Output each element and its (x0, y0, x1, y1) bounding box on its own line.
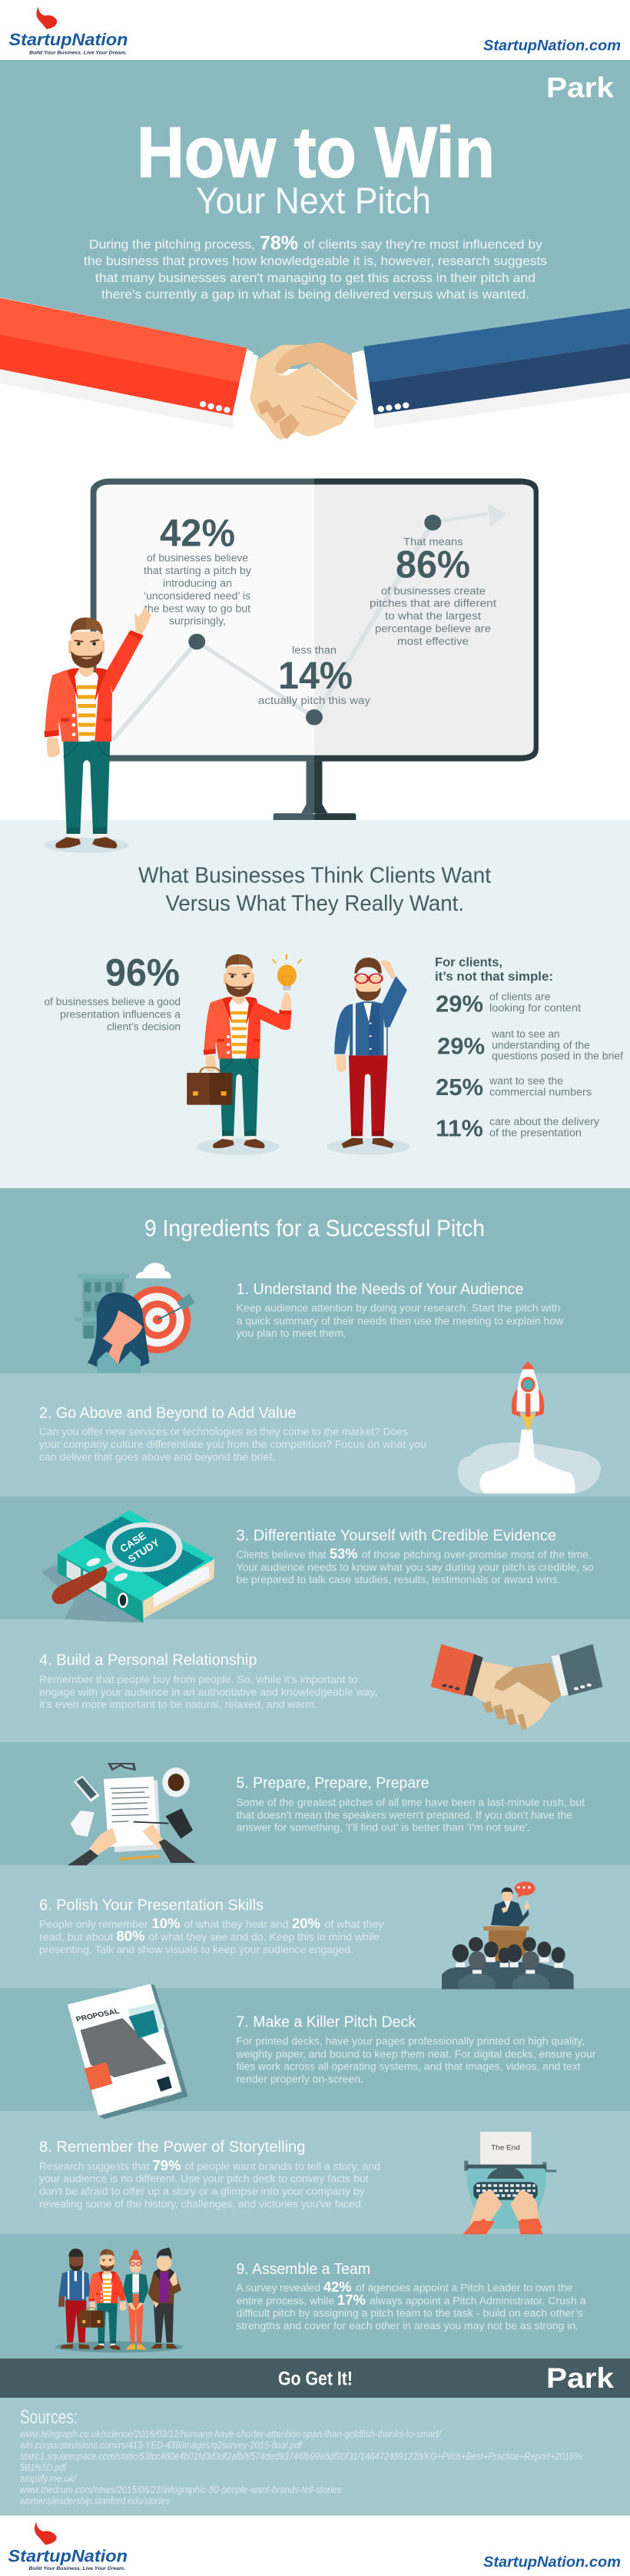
icon: light bulb (273, 954, 301, 991)
stat: 29% content (436, 990, 581, 1017)
arrow head (488, 504, 506, 527)
Park logo: Park (546, 72, 614, 103)
stat: 14%: 14% (278, 654, 353, 697)
intro paragraph: there's currently a gap in what is being delivered versus what is wanted. (101, 287, 529, 301)
ingredient 6 text: of what they see and do. Keep this in mind while (149, 1931, 380, 1943)
stat: 29% understanding: understanding of the (492, 1039, 590, 1051)
stat: 42%: ‘unconsidered need’ is (144, 590, 250, 602)
ingredient 9 text: 9. Assemble a Team (237, 2260, 370, 2278)
sources list: win.corporatevisions.com/rs/413-YED-439/images/q2survey-2015-final.pdf (20, 2440, 303, 2451)
ingredient 4 text: engage with your audience in an authoritative and knowledgeable way, (39, 1686, 377, 1698)
ingredient 6 text: 6. Polish Your Presentation Skills (39, 1897, 264, 1914)
panel: what businesses think versus clients want (0, 820, 630, 1188)
ingredient 3 text: Your audience needs to know what you say during your pitch is credible, so (237, 1562, 593, 1573)
icon: torch flame (36, 7, 57, 29)
the end page label: The End (491, 2143, 520, 2152)
panel: for clients it's not that simple: For clients, (435, 954, 502, 970)
intro paragraph: the business that proves how knowledgeable it is, however, research suggests (84, 254, 547, 268)
stat: 42%: surprisingly, (169, 615, 226, 627)
team member: man in brown jacket (148, 2247, 181, 2349)
ingredient 9 text: A survey revealed (237, 2282, 320, 2293)
lectern (483, 1927, 529, 1964)
ingredient 9 text: strengths and cover for each other in areas you may not be as strong in. (237, 2320, 579, 2332)
ingredient 2 text: Can you offer new services or technologies as they come to the market? Does (39, 1426, 408, 1437)
sources list (20, 2428, 582, 2507)
ingredient 8 text: Research suggests that (39, 2161, 150, 2172)
stat: 42%: of businesses believe (147, 552, 248, 564)
ingredient 1 text: 1. Understand the Needs of Your Audience (237, 1280, 524, 1298)
ingredient 3 text (237, 1526, 593, 1585)
ingredient 4 text: 4. Build a Personal Relationship (39, 1651, 257, 1669)
ingredient 3 text: 53% (330, 1546, 358, 1562)
intro paragraph: 78% (260, 232, 298, 254)
stat: 86% (370, 536, 496, 647)
ingredient 7 text: weighty paper, and bound to keep them neat. For digital decks, ensure your (235, 2049, 596, 2060)
ingredient 6 icon: speaker and audience (442, 1881, 574, 1989)
sources list: www.telegraph.co.uk/science/2016/03/12/humans-have-shorter-attention-span-than-goldfish-thanks-to-smart/ (20, 2428, 442, 2439)
ingredient 2 text: 2. Go Above and Beyond to Add Value (39, 1404, 297, 1422)
blue sleeve (363, 308, 630, 415)
stat: 86%: to what the largest (385, 610, 481, 622)
stat: 96%: presentation influences a (60, 1008, 181, 1021)
ingredient 9 text: 17% (337, 2292, 366, 2308)
ingredient 6 text: of what they (324, 1918, 384, 1930)
stat: 86%: of businesses create (381, 586, 486, 596)
ingredient 9 text: 42% (323, 2279, 352, 2295)
heading: what businesses think: What Businesses Think Clients Want (138, 864, 491, 888)
ingredient 9 text: entire process, while (237, 2295, 334, 2307)
icon: torch flame (35, 2522, 57, 2545)
stat: 11% (436, 1114, 599, 1142)
intro paragraph (84, 232, 547, 301)
ingredient 1 icon: woman and target (75, 1263, 195, 1373)
stat: 29% understanding: want to see an (491, 1028, 559, 1040)
stat: 42%: that starting a pitch by (144, 565, 251, 576)
ingredient 6 text (39, 1897, 384, 1955)
ingredient 2 text (39, 1404, 426, 1463)
stat: 96% (45, 951, 181, 1033)
stat: 42% (144, 512, 251, 627)
stat: 96%: 96% (105, 951, 180, 994)
ingredient 6 text: 10% (152, 1916, 180, 1931)
stat: 25%: 25% (436, 1074, 483, 1100)
ingredient 4 text (39, 1651, 377, 1711)
ingredient 7 icon: proposal booklet (68, 1984, 188, 2119)
ingredient 8 text: your audience is no different. Use your pitch deck to convey facts but (39, 2173, 369, 2184)
stat: 96%: client’s decision (107, 1021, 181, 1033)
ingredient 4 text: it's even more important to be natural, relaxed, and warm. (39, 1698, 317, 1711)
binder clips and hole (85, 1556, 129, 1608)
logo tagline: Build Your Business. Live Your Dream. (29, 51, 127, 55)
sources list: amplify.me.uk/ (20, 2473, 77, 2484)
illustration: presenter pointing at screen (44, 607, 151, 853)
ingredient 3 text: of those pitching over-promise most of the time. (361, 1549, 592, 1560)
team member: woman (123, 2250, 148, 2349)
stat: 86%: most effective (397, 636, 469, 647)
briefcase (187, 1067, 232, 1105)
stat: 96%: of businesses believe a good (45, 996, 181, 1007)
stat: 29% understanding: questions posed in the brief (492, 1050, 623, 1062)
panel: ingredient section bands (0, 1188, 630, 2359)
case study label: STUDY (126, 1536, 161, 1565)
title: How to Win (137, 112, 495, 192)
stat: 86%: pitches that are different (370, 598, 496, 609)
stat: 42%: the best way to go but (144, 603, 250, 615)
stat: 11%: care about the delivery (489, 1116, 599, 1127)
ingredient 6 text: 80% (117, 1929, 144, 1944)
intro paragraph: of clients say they're most influenced by (303, 238, 543, 252)
sources heading: Sources: (20, 2407, 78, 2428)
ingredient 8 text: of people want brands to tell a story, and (184, 2161, 380, 2172)
Park logo: Park (546, 2362, 614, 2394)
stat: 29% content: 29% (436, 990, 483, 1017)
site url: StartupNation.com (483, 37, 621, 54)
stat: 42%: introducing an (163, 578, 232, 589)
ingredient 8 text: 8. Remember the Power of Storytelling (39, 2138, 306, 2156)
monitor stand (301, 762, 314, 813)
ingredient 8 text: revealing some of the history, challenges, and victories you've faced. (39, 2198, 364, 2210)
speaker (491, 1887, 530, 1927)
audience (442, 1937, 574, 1989)
stat: 14%: actually pitch this way (258, 695, 370, 706)
ingredient 3 text: Clients believe that (237, 1549, 327, 1560)
team member: man in blue (58, 2249, 91, 2349)
case study label: CASE (118, 1529, 148, 1555)
sources list: 5B1%5D.pdf (20, 2462, 67, 2473)
ingredient 7 text (235, 2013, 596, 2085)
ingredient 5 text: answer for something, 'I'll find out' is better than 'I'm not sure'. (237, 1821, 530, 1834)
illustration: handshake between red and blue sleeves (0, 297, 630, 440)
panel: for clients it's not that simple (435, 954, 623, 1142)
footer: StartupNation logo and URL (8, 2522, 621, 2571)
ingredient 5 text (237, 1774, 585, 1834)
stat: 86%: That means (403, 536, 463, 547)
ingredient 9 text: difficult pitch by assigning a pitch team to the task - build on each other’s (237, 2307, 583, 2319)
stat: 25%: commercial numbers (489, 1087, 592, 1097)
ingredient 1 text: Keep audience attention by doing your research. Start the pitch with (237, 1302, 561, 1314)
ingredient 7 text: render properly on-screen. (237, 2073, 363, 2085)
illustration: man with briefcase and light bulb (187, 954, 301, 1155)
header: StartupNation logo and URL (0, 0, 630, 60)
stat: 42%: 42% (160, 512, 235, 555)
ingredient 4 text: Remember that people buy from people. So, while it's important to (39, 1674, 358, 1685)
team member: man with red jacket (79, 2249, 126, 2350)
ingredient 3 text: 3. Differentiate Yourself with Credible Evidence (237, 1526, 556, 1545)
sources list: www.thedrum.com/news/2015/06/22/infographic-80-people-want-brands-tell-stories (20, 2485, 341, 2495)
stat: 29% understanding: 29% (437, 1033, 485, 1059)
ingredient 7 text: For printed decks, have your pages professionally printed on high quality, (237, 2035, 585, 2047)
heading: what businesses think: Versus What They Really Want. (166, 891, 464, 916)
intro paragraph: During the pitching process, (89, 238, 255, 252)
ingredient 8 text: 79% (152, 2158, 181, 2173)
logo wordmark: StartupNation (9, 30, 128, 49)
ingredient 6 text: presenting. Talk and show visuals to keep your audience engaged. (39, 1944, 353, 1955)
hero panel background (0, 60, 630, 369)
stat: 14% (258, 644, 370, 706)
hands (250, 343, 357, 440)
ingredient 7 text: 7. Make a Killer Pitch Deck (237, 2013, 416, 2030)
heading: 9 ingredients: 9 Ingredients for a Successful Pitch (144, 1214, 485, 1242)
stat: 11%: 11% (436, 1114, 483, 1142)
stat: 29% content: of clients are (489, 991, 550, 1002)
ingredient 1 text (237, 1280, 564, 1339)
go get it label: Go Get It! (278, 2369, 353, 2390)
ingredient 9 text: of agencies appoint a Pitch Leader to own the (356, 2282, 573, 2293)
stat: 86%: percentage believe are (375, 622, 491, 635)
ingredient 5 text: Some of the greatest pitches of all time have been a last-minute rush, but (237, 1797, 585, 1808)
title (137, 112, 495, 221)
stat: 14%: less than (292, 644, 337, 656)
ingredient 6 text: read, but about (39, 1931, 114, 1943)
illustration: puzzled man with glasses (327, 958, 410, 1155)
ingredient 9 text (237, 2260, 586, 2332)
red sleeve (0, 297, 247, 416)
sources list: womensleadership.stanford.edu/stories (20, 2496, 170, 2507)
ingredient 4 icon: handshake (431, 1644, 602, 1730)
ingredient 8 text (39, 2138, 380, 2210)
ingredient 9 icon: team of four (55, 2247, 183, 2352)
stat: 86%: 86% (396, 543, 470, 586)
logo wordmark: StartupNation (8, 2547, 128, 2565)
ingredient 2 text: your company culture differentiate you from the competition? Focus on what you (39, 1439, 426, 1450)
proposal label: PROPOSAL (75, 2007, 121, 2023)
ingredient 8 text: don't be afraid to offer up a story or a glimpse into your company by (39, 2186, 365, 2197)
subtitle: Your Next Pitch (196, 181, 431, 221)
ingredient 6 text: People only remember (39, 1918, 148, 1930)
stat: 25%: want to see the (489, 1075, 563, 1087)
panel: for clients it's not that simple: it’s not that simple: (435, 969, 553, 984)
call to action band (0, 2359, 630, 2398)
heading: what businesses think (138, 864, 491, 916)
stat: 29% understanding (437, 1028, 623, 1062)
ingredient 5 icon: desk with notes and coffee (68, 1764, 196, 1865)
ingredient 7 text: files work across all operating systems, and that images, videos, and text (237, 2061, 581, 2072)
site url: StartupNation.com (483, 2554, 621, 2571)
logo tagline: Build Your Business. Live Your Dream. (29, 2566, 125, 2571)
ingredient 8 icon: typewriter (464, 2132, 556, 2229)
ingredient 6 text: of what they hear and (184, 1918, 289, 1930)
ingredient 2 text: can deliver that goes above and beyond the brief. (39, 1451, 275, 1463)
line chart (112, 513, 488, 740)
ingredient 6 text: 20% (292, 1916, 320, 1931)
intro paragraph: that many businesses aren't managing to get this across in their pitch and (95, 271, 536, 285)
ingredient 1 text: a quick summary of their needs then use the meeting to explain how (237, 1316, 564, 1326)
case study label (118, 1529, 161, 1565)
typewriter sleeve ends (463, 2221, 543, 2234)
stat: 29% content: looking for content (489, 1002, 581, 1014)
ingredient 3 text: be prepared to talk case studies, results, testimonials or award wins. (237, 1574, 561, 1585)
speech bubble (515, 1881, 536, 1897)
ingredient 2 icon: rocket (458, 1362, 601, 1493)
panel: sources (0, 2398, 630, 2516)
stat: 11%: of the presentation (489, 1127, 582, 1139)
ingredient 3 icon: case study binder and magnifier (41, 1510, 214, 1623)
ingredient 5 text: 5. Prepare, Prepare, Prepare (237, 1774, 429, 1792)
ingredient 5 text: that doesn't mean the speakers weren't prepared. If you don't have the (237, 1809, 572, 1821)
ingredient 1 text: you plan to meet them. (237, 1328, 346, 1339)
chart points (188, 515, 441, 725)
ingredient 9 text: always appoint a Pitch Administrator. Crush a (370, 2295, 586, 2307)
panel: presentation screen with line chart (91, 479, 539, 821)
stat: 25% (436, 1074, 592, 1100)
